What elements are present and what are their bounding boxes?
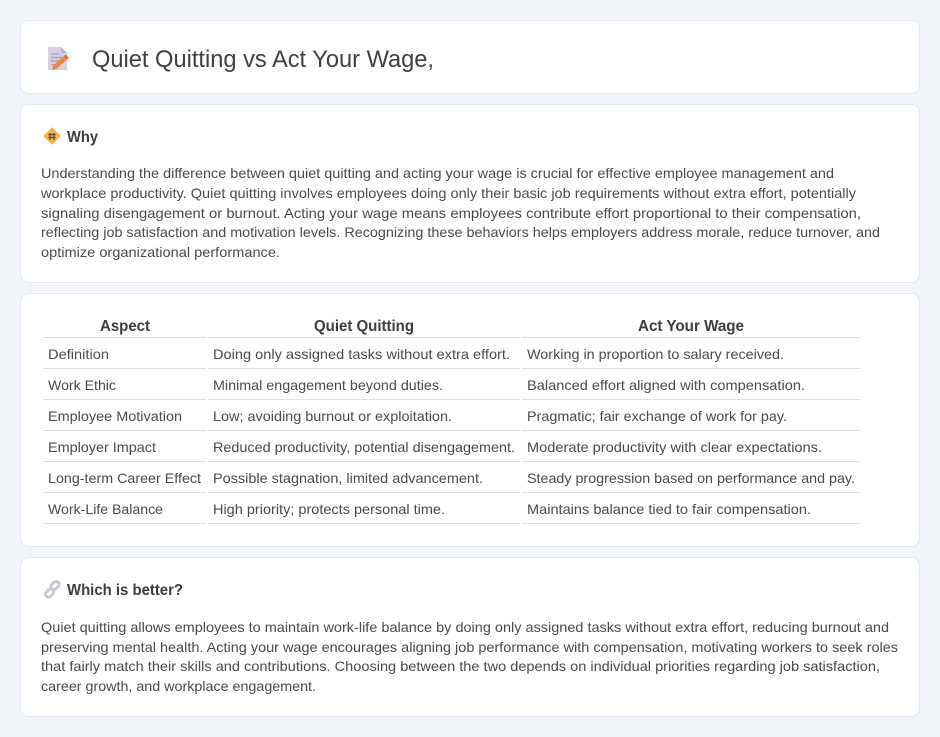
table row: work ethic	[43, 377, 860, 400]
table row: work-life balance	[43, 501, 860, 524]
table row: employer impact: Moderate productivity with clear expectations.	[527, 439, 822, 455]
table row: employee motivation: Low; avoiding burnout or exploitation.	[213, 408, 452, 424]
table row: work-life balance: High priority; protects personal time.	[213, 501, 445, 517]
text block: which is better paragraph: Quiet quitting allows employees to maintain work-life balance by doing only assigned tasks without extra effort, reducing burnout and	[41, 619, 889, 635]
table row: employer impact: Employer Impact	[48, 439, 156, 455]
table row: definition: Definition	[48, 346, 109, 362]
text block: why paragraph	[40, 165, 880, 260]
text block: why paragraph: reflecting job satisfaction and motivation levels. Recognizing these behaviors helps employers address morale, reduce turnover, and	[41, 224, 880, 240]
table row: work ethic: Work Ethic	[48, 377, 116, 393]
icon: memo with pencil	[48, 47, 69, 70]
table row: employer impact	[43, 439, 860, 462]
table row: definition: Doing only assigned tasks without extra effort.	[213, 346, 510, 362]
panel: which is better	[20, 558, 920, 716]
panel: why	[20, 104, 920, 282]
text block: why paragraph: optimize organizational performance.	[41, 244, 280, 260]
text block: why paragraph: workplace productivity. Quiet quitting involves employees doing only their basic job requirements without extra effort, potentially	[40, 185, 856, 201]
table row: definition	[43, 346, 860, 369]
table row: work-life balance: Work-Life Balance	[48, 501, 163, 517]
table row: work-life balance: Maintains balance tied to fair compensation.	[527, 501, 811, 517]
text block: why paragraph: signaling disengagement or burnout. Acting your wage means employees contribute effort proportional to their compensation,	[41, 205, 861, 221]
table row: long-term career effect	[43, 470, 860, 493]
icon: construction diamond	[44, 128, 60, 144]
text block: which is better paragraph: that fairly match their skills and contributions. Choosing between the two depends on individual priorities regarding job satisfaction,	[41, 658, 880, 674]
text block: why paragraph: Understanding the difference between quiet quitting and acting your wage is crucial for effective employee management and	[41, 165, 834, 181]
panel: title header	[20, 20, 920, 94]
heading: why: Why	[67, 129, 98, 146]
table row: employer impact: Reduced productivity, potential disengagement.	[213, 439, 515, 455]
icon: chain link	[44, 580, 60, 598]
table row: long-term career effect: Possible stagnation, limited advancement.	[213, 470, 483, 486]
title: Quiet Quitting vs Act Your Wage,	[92, 46, 434, 73]
table row: definition: Working in proportion to salary received.	[527, 346, 784, 362]
table row: long-term career effect: Long-term Career Effect	[48, 470, 201, 486]
heading: which is better: Which is better?	[67, 582, 183, 599]
table row: work ethic: Balanced effort aligned with compensation.	[527, 377, 805, 393]
table row: employee motivation: Employee Motivation	[48, 408, 182, 424]
text block: which is better paragraph: career growth, and workplace engagement.	[41, 678, 316, 694]
table header row: Quiet Quitting	[314, 318, 414, 335]
panel: comparison table	[20, 294, 920, 546]
table row: employee motivation	[43, 408, 860, 431]
table header row: Aspect	[100, 318, 151, 335]
text block: which is better paragraph	[41, 619, 898, 694]
table header row: Act Your Wage	[638, 318, 744, 335]
table row: work ethic: Minimal engagement beyond duties.	[213, 377, 443, 393]
table row: long-term career effect: Steady progression based on performance and pay.	[527, 470, 855, 486]
table header row	[43, 318, 860, 338]
table row: employee motivation: Pragmatic; fair exchange of work for pay.	[527, 408, 787, 424]
text block: which is better paragraph: preserving mental health. Acting your wage encourages aligning job performance with compensation, motivating workers to seek roles	[41, 639, 898, 655]
